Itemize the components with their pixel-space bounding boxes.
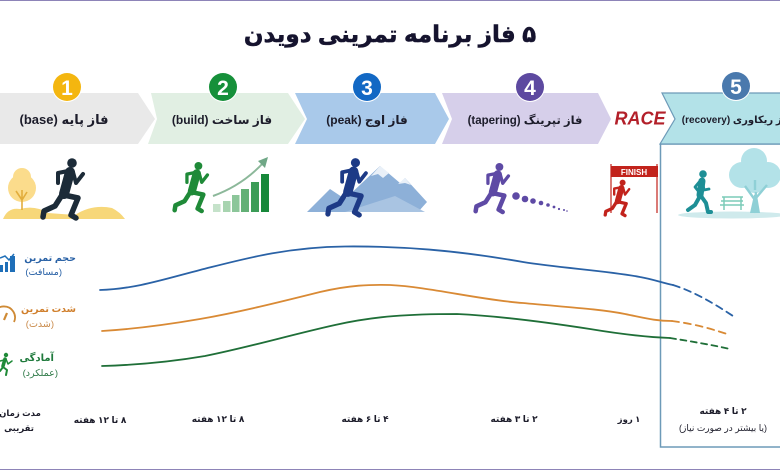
number badge 5: 5 [730,76,742,99]
duration: race: ۱ روز [617,414,640,425]
duration: phase 3: ۴ تا ۶ هفته [341,414,389,424]
curve: volume [100,246,736,318]
number badge 5 [721,71,751,101]
curve: intensity [102,285,730,335]
icon: race finish banner and runner: FINISH [621,168,647,177]
phase 4 chevron [442,93,611,144]
duration: recovery: ۲ تا ۴ هفته [699,406,747,416]
label: fitness [20,351,58,379]
label: training intensity [21,304,76,330]
phase 2 chevron [148,93,305,144]
icon: volume bars [0,254,15,272]
icon: small green runner [0,353,12,375]
label: training intensity: شدت تمرین [21,304,76,315]
duration: phase 4: ۲ تا ۳ هفته [490,414,538,424]
duration: recovery: (یا بیشتر در صورت نیاز) [679,423,767,433]
label: approximate duration: تقریبی [4,423,34,434]
label: training volume [24,253,76,278]
icon: race finish banner and runner [605,164,658,216]
panel: recovery highlight [660,144,780,447]
label: training intensity: (شدت) [26,319,54,330]
number badge 1: 1 [61,77,73,100]
number badge 4: 4 [524,77,536,100]
phase 4 chevron: فاز تپرینگ (tapering) [468,113,582,127]
number badge 4 [515,72,545,102]
label: training volume: حجم تمرین [24,253,76,264]
duration: recovery [679,406,767,433]
number badge 3: 3 [361,77,373,100]
curve: fitness [102,314,730,366]
label: approximate duration: مدت زمان [0,408,41,419]
icon: phase 2 runner and rising bars [175,157,269,212]
phase 2 chevron: فاز ساخت (build) [172,113,272,127]
label: training volume: (مسافت) [25,267,62,278]
icon: phase 4 runner and fading dots [476,163,568,212]
line chart: training curves [100,246,736,366]
duration: phase 1: ۸ تا ۱۲ هفته [74,415,127,425]
icon: phase 3 mountains and runner [307,158,427,215]
icon: gauge [0,306,15,322]
phase 1 chevron [0,93,155,144]
number badge 3 [352,72,382,102]
number badge 1 [52,72,82,102]
label: fitness: (عملکرد) [23,368,58,379]
label: fitness: آمادگی [20,351,55,364]
phase 3 chevron [295,93,449,144]
phase 3 chevron: فاز اوج (peak) [326,113,408,128]
phase 5 chevron [660,93,780,144]
number badge 2: 2 [217,77,229,100]
title: ۵ فاز برنامه تمرینی دویدن [244,21,536,48]
label: approximate duration [0,408,41,434]
phase 1 chevron: فاز پایه (base) [20,112,108,127]
number badge 2 [208,72,238,102]
icon: recovery walker, bench and tree [678,148,780,218]
icon: phase 1 tree and runner [3,158,125,219]
race label: RACE [614,108,666,128]
duration: phase 2: ۸ تا ۱۲ هفته [192,414,245,424]
